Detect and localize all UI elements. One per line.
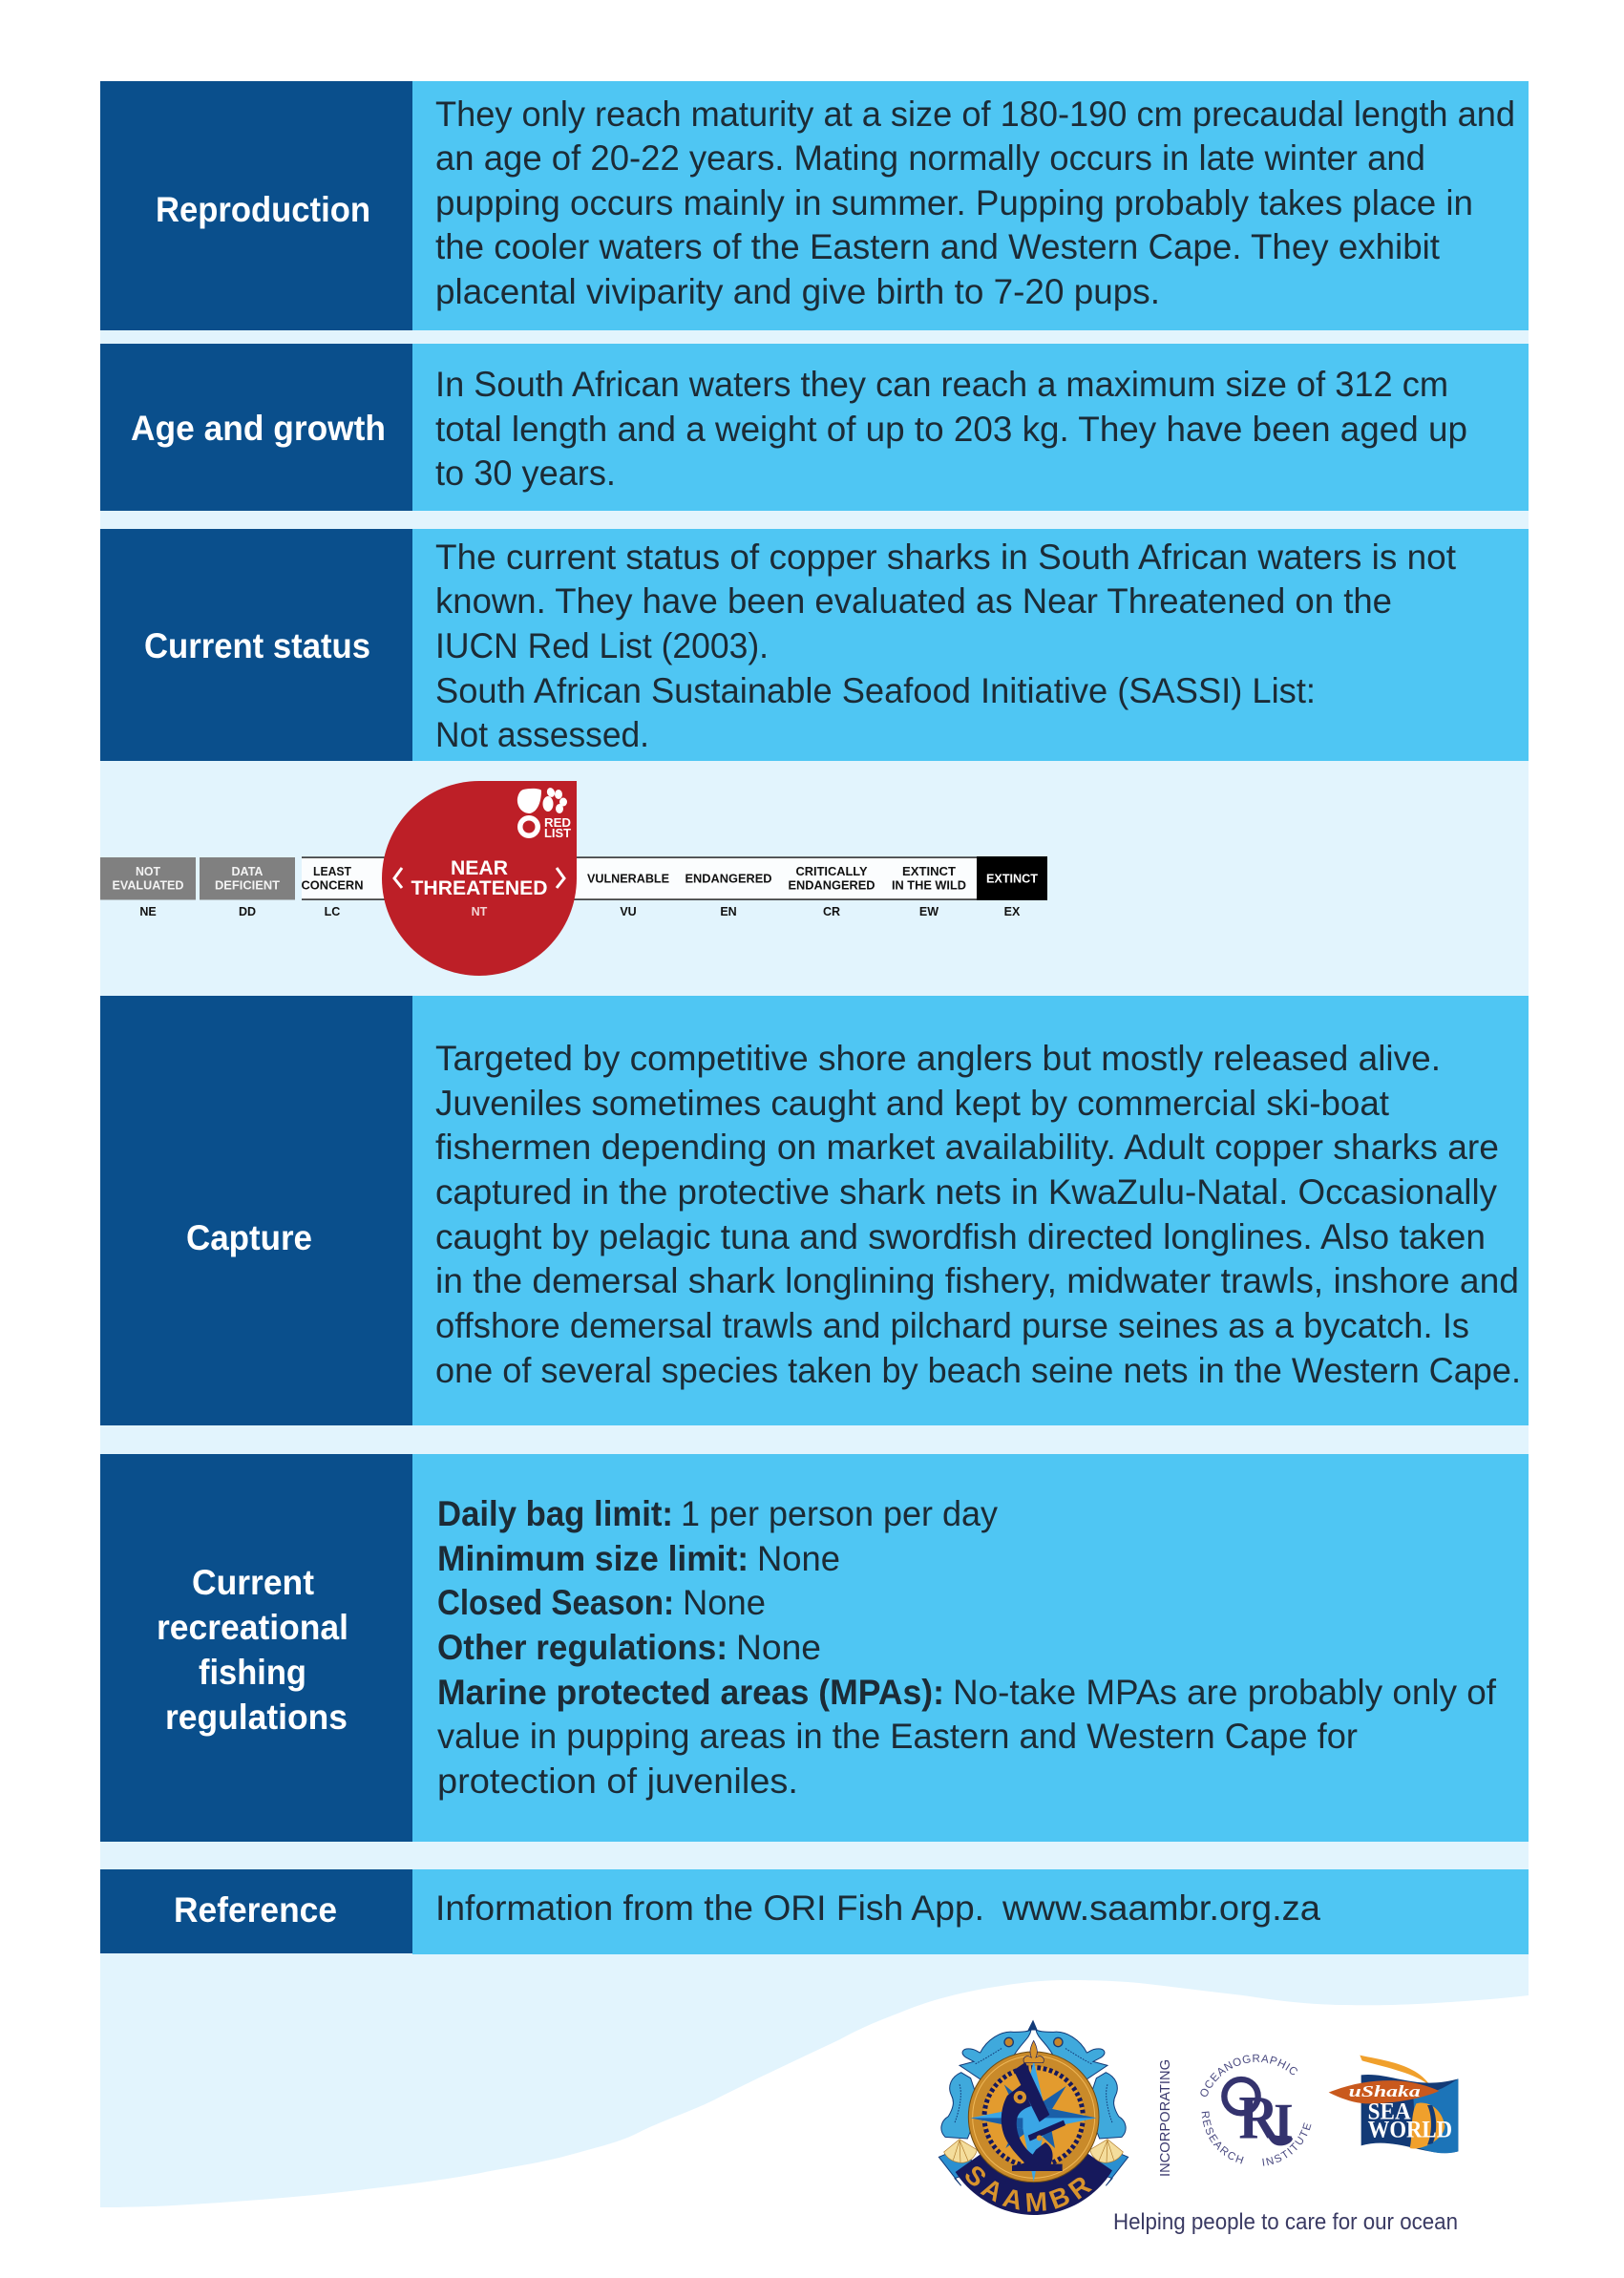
text block: capture: Targeted by competitive shore anglers but mostly released alive. [435,1039,1441,1078]
microscope [1002,2062,1065,2171]
panel: age and growth [100,344,1529,511]
text block: regulations: 1 per person per day [681,1494,998,1533]
ORI monogram [1224,2079,1294,2152]
scale category labels: EXTINCT [986,873,1038,886]
label: near threatened: NEAR [451,857,508,879]
text block: regulations: None [757,1539,840,1578]
wordmark: WORLD [1368,2117,1452,2143]
text block: reproduction: placental viviparity and give birth to 7-20 pups. [435,272,1160,311]
label: near threatened: NT [472,905,488,918]
scale category labels: CRITICALLY [796,865,868,878]
text block: reproduction: an age of 20-22 years. Mating normally occurs in late winter and [435,138,1425,178]
text block: age and growth: total length and a weight of up to 203 kg. They have been aged up [435,410,1467,449]
text block: current status: Not assessed. [435,715,649,754]
logo: ORI: OCEANOGRAPHIC [1200,2055,1297,2097]
logo: SAAMBR crest: SAAMBR [965,2166,1092,2212]
chart: IUCN red list scale [100,781,1047,976]
scale category labels: EXTINCT [902,865,956,878]
scale category codes: EX [1004,905,1021,918]
scale category labels: VULNERABLE [587,873,669,886]
text block: reproduction: pupping occurs mainly in summer. Pupping probably takes place in [435,183,1473,222]
text block: age and growth: In South African waters they can reach a maximum size of 312 cm [435,365,1448,404]
text block: capture: caught by pelagic tuna and swordfish directed longlines. Also taken [435,1217,1486,1256]
ORI monogram: R [1238,2083,1279,2152]
heading: current recreational fishing regulations: fishing [199,1653,306,1692]
scale band [100,856,1047,900]
panel: capture [100,996,1529,1425]
text block: capture: captured in the protective shark nets in KwaZulu-Natal. Occasionally [435,1172,1497,1212]
scale category labels: IN THE WILD [892,878,966,892]
text block: capture: fishermen depending on market availability. Adult copper sharks are [435,1128,1499,1167]
scale category labels: DEFICIENT [215,878,280,892]
ORI monogram: I [1274,2092,1294,2149]
leaf [1329,2080,1439,2103]
text block: current status [435,538,1457,754]
panel: current recreational fishing regulations [100,1454,1529,1842]
heading: age and growth: Age and growth [131,409,386,448]
scale category codes: LC [325,905,340,918]
text block: age and growth: to 30 years. [435,453,616,493]
text block: regulations: None [683,1583,766,1622]
scale category codes: CR [823,905,840,918]
dolphins [941,2021,1126,2139]
text block: regulations: Daily bag limit: [437,1494,673,1533]
heading: capture: Capture [186,1218,312,1257]
text block: regulations: value in pupping areas in the Eastern and Western Cape for [437,1717,1358,1756]
heading: current recreational fishing regulations [157,1563,348,1737]
scale category codes: DD [239,905,256,918]
gold compass ring [968,2052,1099,2183]
text block: reproduction [435,95,1515,311]
panel: reference [100,1869,1529,1954]
scale category codes: EW [919,905,939,918]
shells [944,2140,1123,2162]
text block: regulations: Other regulations: [437,1628,728,1667]
circular wording [1206,2062,1309,2099]
scale category labels: ENDANGERED [789,878,875,892]
wordmark [1349,2082,1452,2143]
heading: reference: Reference [174,1890,337,1930]
text block: reference: www.saambr.org.za [1002,1888,1320,1928]
flag [1361,2075,1458,2153]
logo: ORI [1200,2055,1312,2166]
icon: red list logo [517,787,571,840]
text block: reference: Information from the ORI Fish App. [435,1888,984,1928]
scale category codes [139,905,1021,918]
text block: current status: IUCN Red List (2003). [435,626,769,665]
scale category labels: DATA [231,865,264,878]
text block: regulations: Marine protected areas (MPAs): [437,1673,944,1712]
text block: regulations: No-take MPAs are probably only of [953,1673,1497,1712]
scale category labels: LEAST [313,865,351,878]
text block: age and growth [435,365,1467,493]
scale category codes: VU [620,905,637,918]
text block: current status: South African Sustainable Seafood Initiative (SASSI) List: [435,671,1316,710]
tagline: Helping people to care for our ocean [1113,2209,1458,2235]
text block: current status: known. They have been evaluated as Near Threatened on the [435,581,1392,621]
heading: current recreational fishing regulations: regulations [165,1698,348,1737]
text block: capture: in the demersal shark longlining fishery, midwater trawls, inshore and [435,1261,1519,1300]
text block: reference [435,1888,1320,1928]
fish stripes [1410,2103,1445,2149]
scale category labels: CONCERN [302,878,363,892]
text block: capture: Juveniles sometimes caught and kept by commercial ski-boat [435,1084,1390,1123]
text block: reproduction: They only reach maturity at a size of 180-190 cm precaudal length and [435,95,1515,134]
text block: capture: offshore demersal trawls and pilchard purse seines as a bycatch. Is [435,1306,1469,1345]
label: near threatened [411,857,548,918]
heading: current recreational fishing regulations: Current [192,1563,314,1602]
orange streak [1360,2056,1430,2086]
text block: regulations [437,1494,1497,1801]
text block: capture: one of several species taken by beach seine nets in the Western Cape. [435,1351,1521,1390]
logo wordmark [961,2172,1108,2211]
heading: current status: Current status [144,626,370,665]
panel: reproduction [100,81,1529,330]
wordmark: SEA [1368,2098,1411,2124]
dolphin scale texture [955,2048,1112,2122]
text block: regulations: Minimum size limit: [437,1539,749,1578]
text block: regulations: None [736,1628,821,1667]
icon: red list logo: LIST [544,826,571,840]
text block: regulations: Closed Season: [437,1583,674,1622]
text block: reproduction: the cooler waters of the Eastern and Western Cape. They exhibit [435,227,1441,266]
compass star [971,2060,1096,2182]
icon: chevrons [394,868,564,888]
label: near threatened: THREATENED [411,877,548,899]
scale category labels: ENDANGERED [685,873,771,886]
text block: current status: The current status of copper sharks in South African waters is not [435,538,1457,577]
panel: current status [100,529,1529,761]
text block: capture [435,1039,1521,1390]
scale category labels: NOT [136,865,160,878]
text block: regulations: protection of juveniles. [437,1761,798,1801]
scale category codes: NE [139,905,157,918]
text: incorporating: INCORPORATING [1158,2059,1173,2177]
scale category labels: EVALUATED [113,878,183,892]
ribbon [939,2117,1128,2215]
logo: ORI: RESEARCH INSTITUTE [1201,2112,1312,2166]
heading: reproduction: Reproduction [156,190,370,229]
heading: current recreational fishing regulations: recreational [157,1608,348,1647]
scale category labels [113,865,1038,892]
fleur de lis [1023,2040,1044,2063]
scale category codes: EN [720,905,737,918]
icon: red list logo: RED [544,815,571,830]
logo: SAAMBR crest [938,2020,1128,2215]
red near threatened marker [382,781,577,976]
wordmark: uShaka [1349,2082,1421,2100]
logo: uShaka Sea World [1329,2056,1458,2153]
